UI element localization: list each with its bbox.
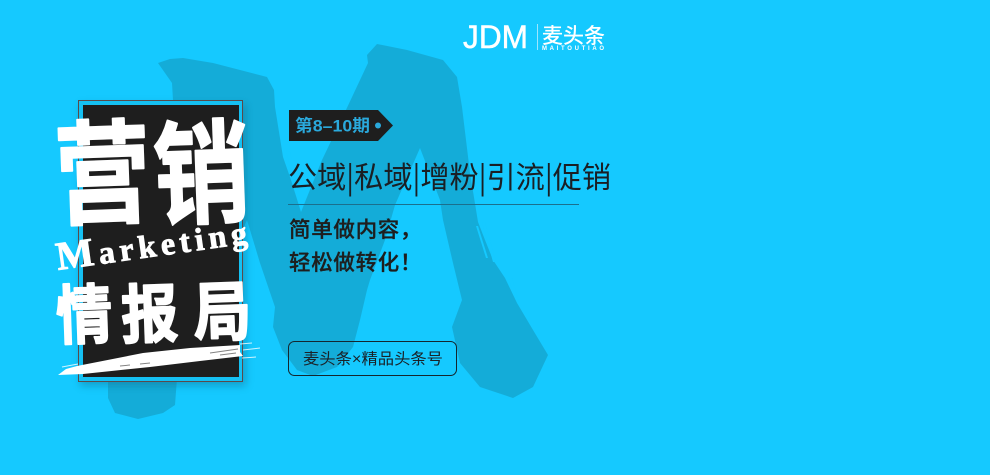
title: 情报局: 情 bbox=[54, 263, 114, 358]
title: 情报局 bbox=[54, 259, 253, 358]
tag: issue number bbox=[289, 110, 393, 141]
text block: slogan: 简单做内容， bbox=[289, 213, 422, 244]
logo: JDM 麦头条: JDM bbox=[463, 19, 528, 55]
watermark: brush letter M bbox=[108, 44, 548, 419]
button: 麦头条×精品头条号: 麦头条×精品头条号 bbox=[303, 350, 443, 368]
tag: issue number: 第8–10期 bbox=[295, 116, 370, 136]
brush stroke underline bbox=[58, 343, 260, 375]
heading: topics: 公域|私域|增粉|引流|促销 bbox=[288, 153, 611, 197]
title: 情报局: 局 bbox=[191, 259, 253, 355]
logo: JDM 麦头条: MAITOUTIAO bbox=[542, 46, 604, 52]
title: 情报局: 报 bbox=[119, 263, 180, 357]
title: Marketing: Marketing bbox=[53, 208, 249, 279]
card: dark framed panel bbox=[78, 100, 246, 386]
button: 麦头条×精品头条号 bbox=[288, 342, 456, 376]
logo: JDM 麦头条 bbox=[463, 19, 605, 55]
divider bbox=[288, 204, 579, 205]
text block: slogan: 轻松做转化！ bbox=[289, 246, 422, 277]
text block: slogan bbox=[289, 213, 422, 277]
title: 营销: 营 bbox=[51, 84, 153, 249]
title: 营销 bbox=[51, 84, 252, 249]
logo: JDM 麦头条: 麦头条 bbox=[542, 20, 605, 50]
title: 营销: 销 bbox=[150, 84, 252, 249]
